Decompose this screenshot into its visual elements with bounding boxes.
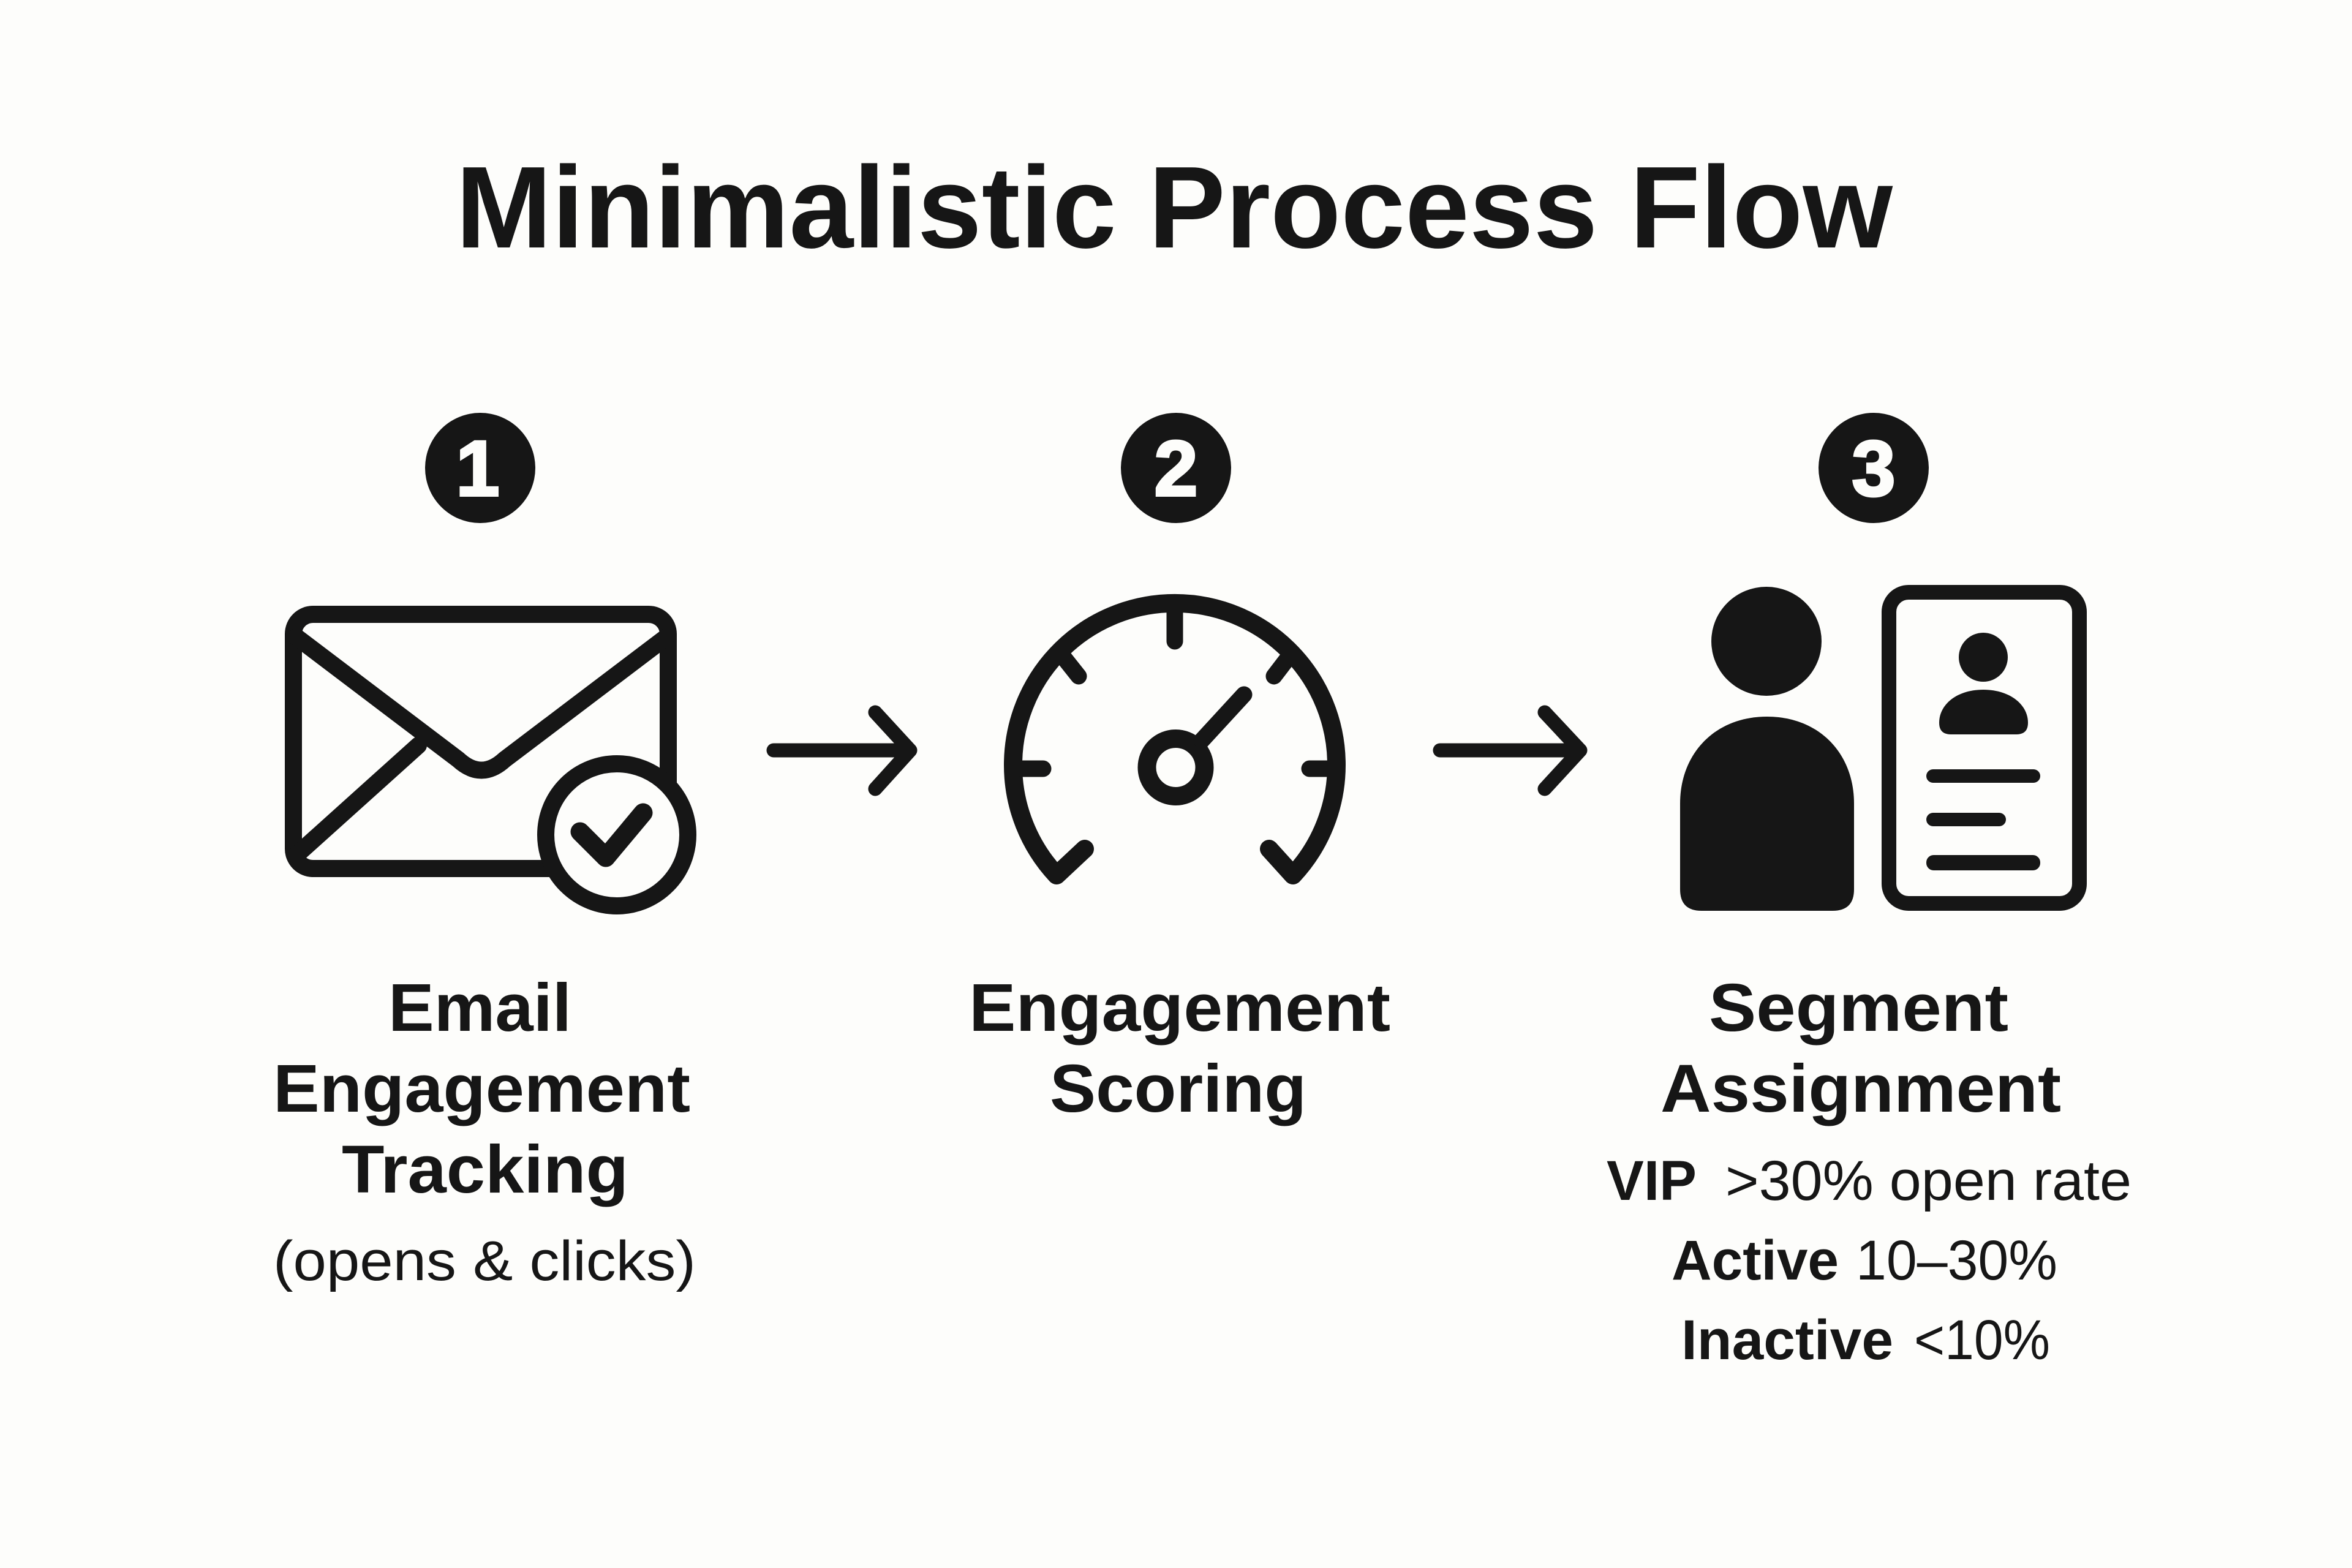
step 1 note: (opens & clicks) <box>273 1230 696 1292</box>
title: Minimalistic Process Flow <box>456 143 1893 273</box>
step 2 label <box>969 970 1390 1126</box>
segment row: Inactive: <10% <box>1914 1309 2050 1371</box>
badge: number 2 <box>1121 413 1231 523</box>
step 3 label: Segment <box>1709 970 2008 1046</box>
step 1 label: Email <box>388 970 571 1046</box>
segment row: Active: Active <box>1672 1229 1839 1292</box>
badge: number 2: 2 <box>1154 425 1198 513</box>
arrow: step 1 to step 2 <box>774 712 910 789</box>
step 3 column <box>1607 413 2132 1371</box>
icon: envelope with check mark <box>293 614 688 906</box>
segment row: Active <box>1672 1229 2057 1292</box>
step 3 label <box>1660 970 2061 1126</box>
segment row: VIP: VIP <box>1607 1150 1697 1212</box>
segment row: Inactive <box>1681 1309 2050 1371</box>
badge: number 3 <box>1819 413 1929 523</box>
segment row: Active: 10–30% <box>1856 1229 2057 1292</box>
step 3 label: Assignment <box>1660 1051 2061 1126</box>
segment row: Inactive: Inactive <box>1681 1309 1893 1371</box>
step 1 label: Tracking <box>342 1132 628 1207</box>
segment row: VIP: >30% open rate <box>1725 1150 2132 1212</box>
step 2 column <box>969 413 1390 1126</box>
step 1 label <box>273 970 690 1207</box>
step 2 label: Scoring <box>1050 1051 1306 1126</box>
step 1 label: Engagement <box>273 1051 690 1126</box>
icon: person with profile card <box>1680 587 2079 911</box>
badge: number 1 <box>425 413 535 523</box>
step 2 label: Engagement <box>969 970 1390 1046</box>
badge: number 1: 1 <box>456 425 500 513</box>
arrow: step 2 to step 3 <box>1440 712 1580 789</box>
badge: number 3: 3 <box>1852 425 1896 513</box>
step 1 column <box>273 413 696 1292</box>
icon: speedometer gauge <box>1013 603 1336 875</box>
